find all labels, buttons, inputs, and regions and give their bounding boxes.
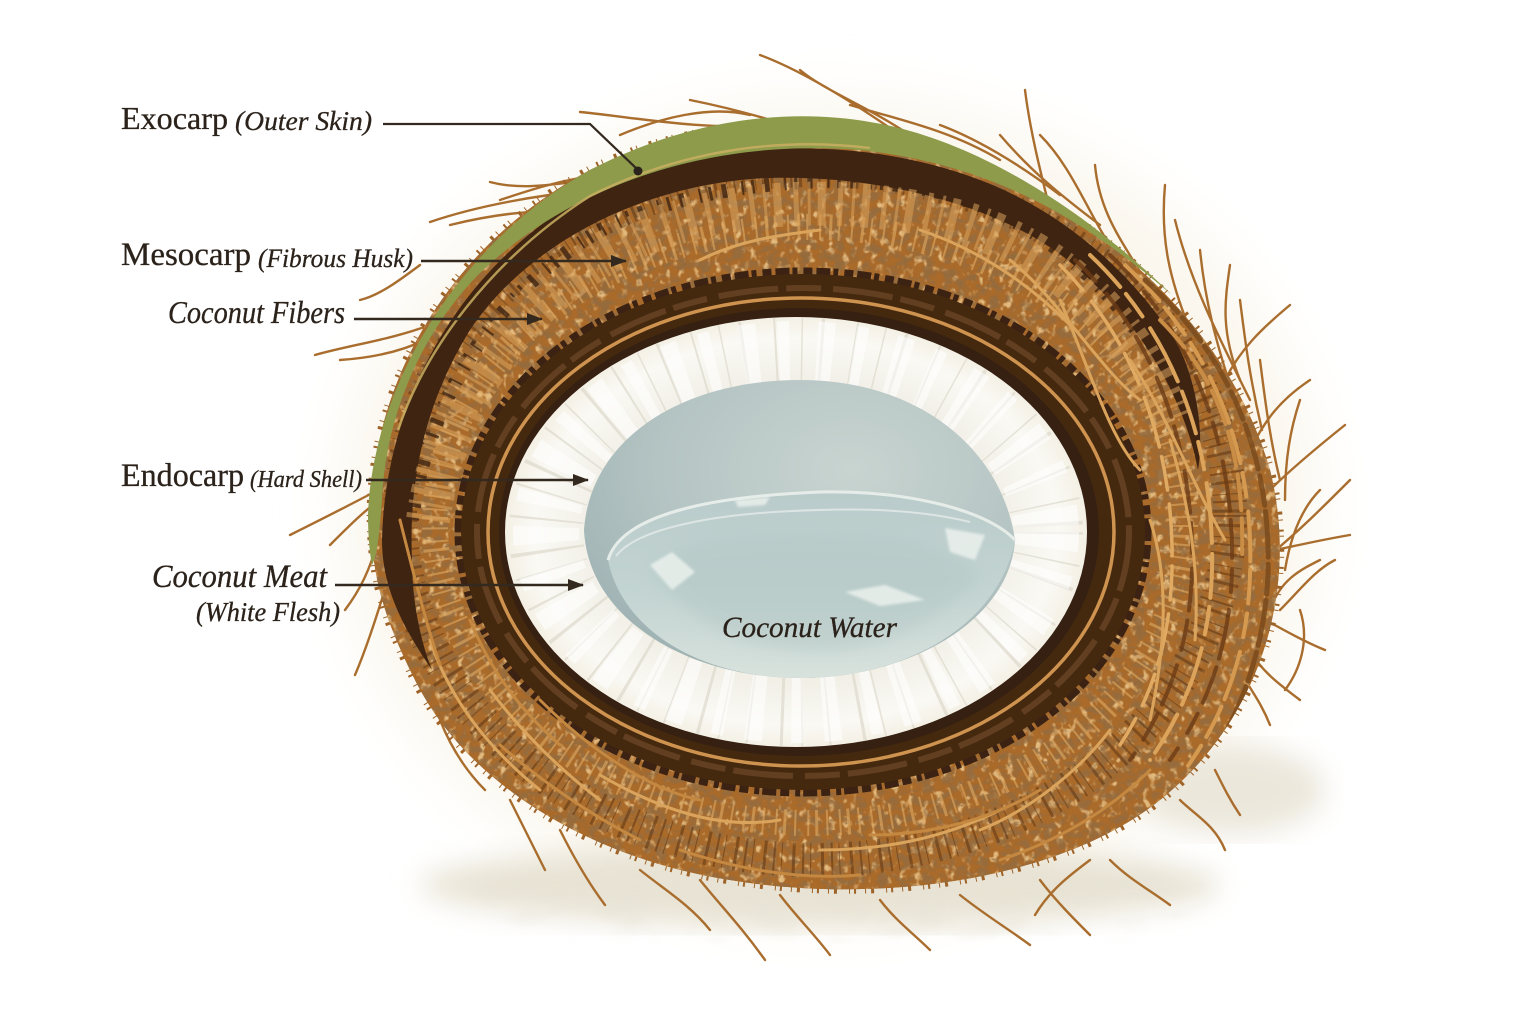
long right-side fibres	[1060, 255, 1268, 770]
arrow: coconut meat	[335, 584, 583, 586]
warm paper halo and ground shadow	[340, 100, 1325, 960]
label: endocarp	[121, 458, 362, 494]
coconut cavity dome	[584, 380, 1015, 678]
label: mesocarp: Mesocarp	[121, 237, 251, 273]
exocarp green skin	[368, 116, 1172, 565]
endocarp hard shell rings	[458, 271, 1148, 793]
label: exocarp: Exocarp	[121, 100, 228, 136]
mesocarp dark band beneath the skin	[382, 148, 1200, 670]
label: coconut meat: Coconut Meat	[152, 559, 328, 595]
coconut meat white flesh	[505, 317, 1087, 747]
label: coconut fibers: Coconut Fibers	[168, 294, 345, 330]
label: exocarp	[121, 100, 372, 136]
exocarp highlight	[398, 144, 870, 430]
label: endocarp: Endocarp	[121, 458, 244, 494]
coconut water surface	[608, 492, 1015, 678]
label: endocarp: (Hard Shell)	[250, 467, 362, 493]
loose husk hairs: behind the nut	[290, 55, 1350, 960]
arrow: endocarp	[366, 479, 588, 481]
arrow: coconut fibers	[354, 318, 542, 320]
label: mesocarp	[121, 237, 413, 273]
label: coconut meat	[152, 559, 340, 627]
label: exocarp: (Outer Skin)	[235, 106, 372, 136]
dark fringe of fibres against the band	[412, 181, 1140, 520]
outer husk body	[371, 125, 1280, 889]
arrow: mesocarp	[421, 260, 626, 262]
label: coconut meat: (White Flesh)	[196, 597, 340, 627]
label: mesocarp: (Fibrous Husk)	[258, 244, 413, 273]
pale mesocarp fibres over the band	[428, 204, 1170, 520]
label: coconut water: Coconut Water	[722, 611, 897, 644]
foreground husk fibres	[400, 230, 1225, 876]
leader: exocarp	[383, 124, 642, 176]
husk fibre texture	[374, 148, 1280, 890]
